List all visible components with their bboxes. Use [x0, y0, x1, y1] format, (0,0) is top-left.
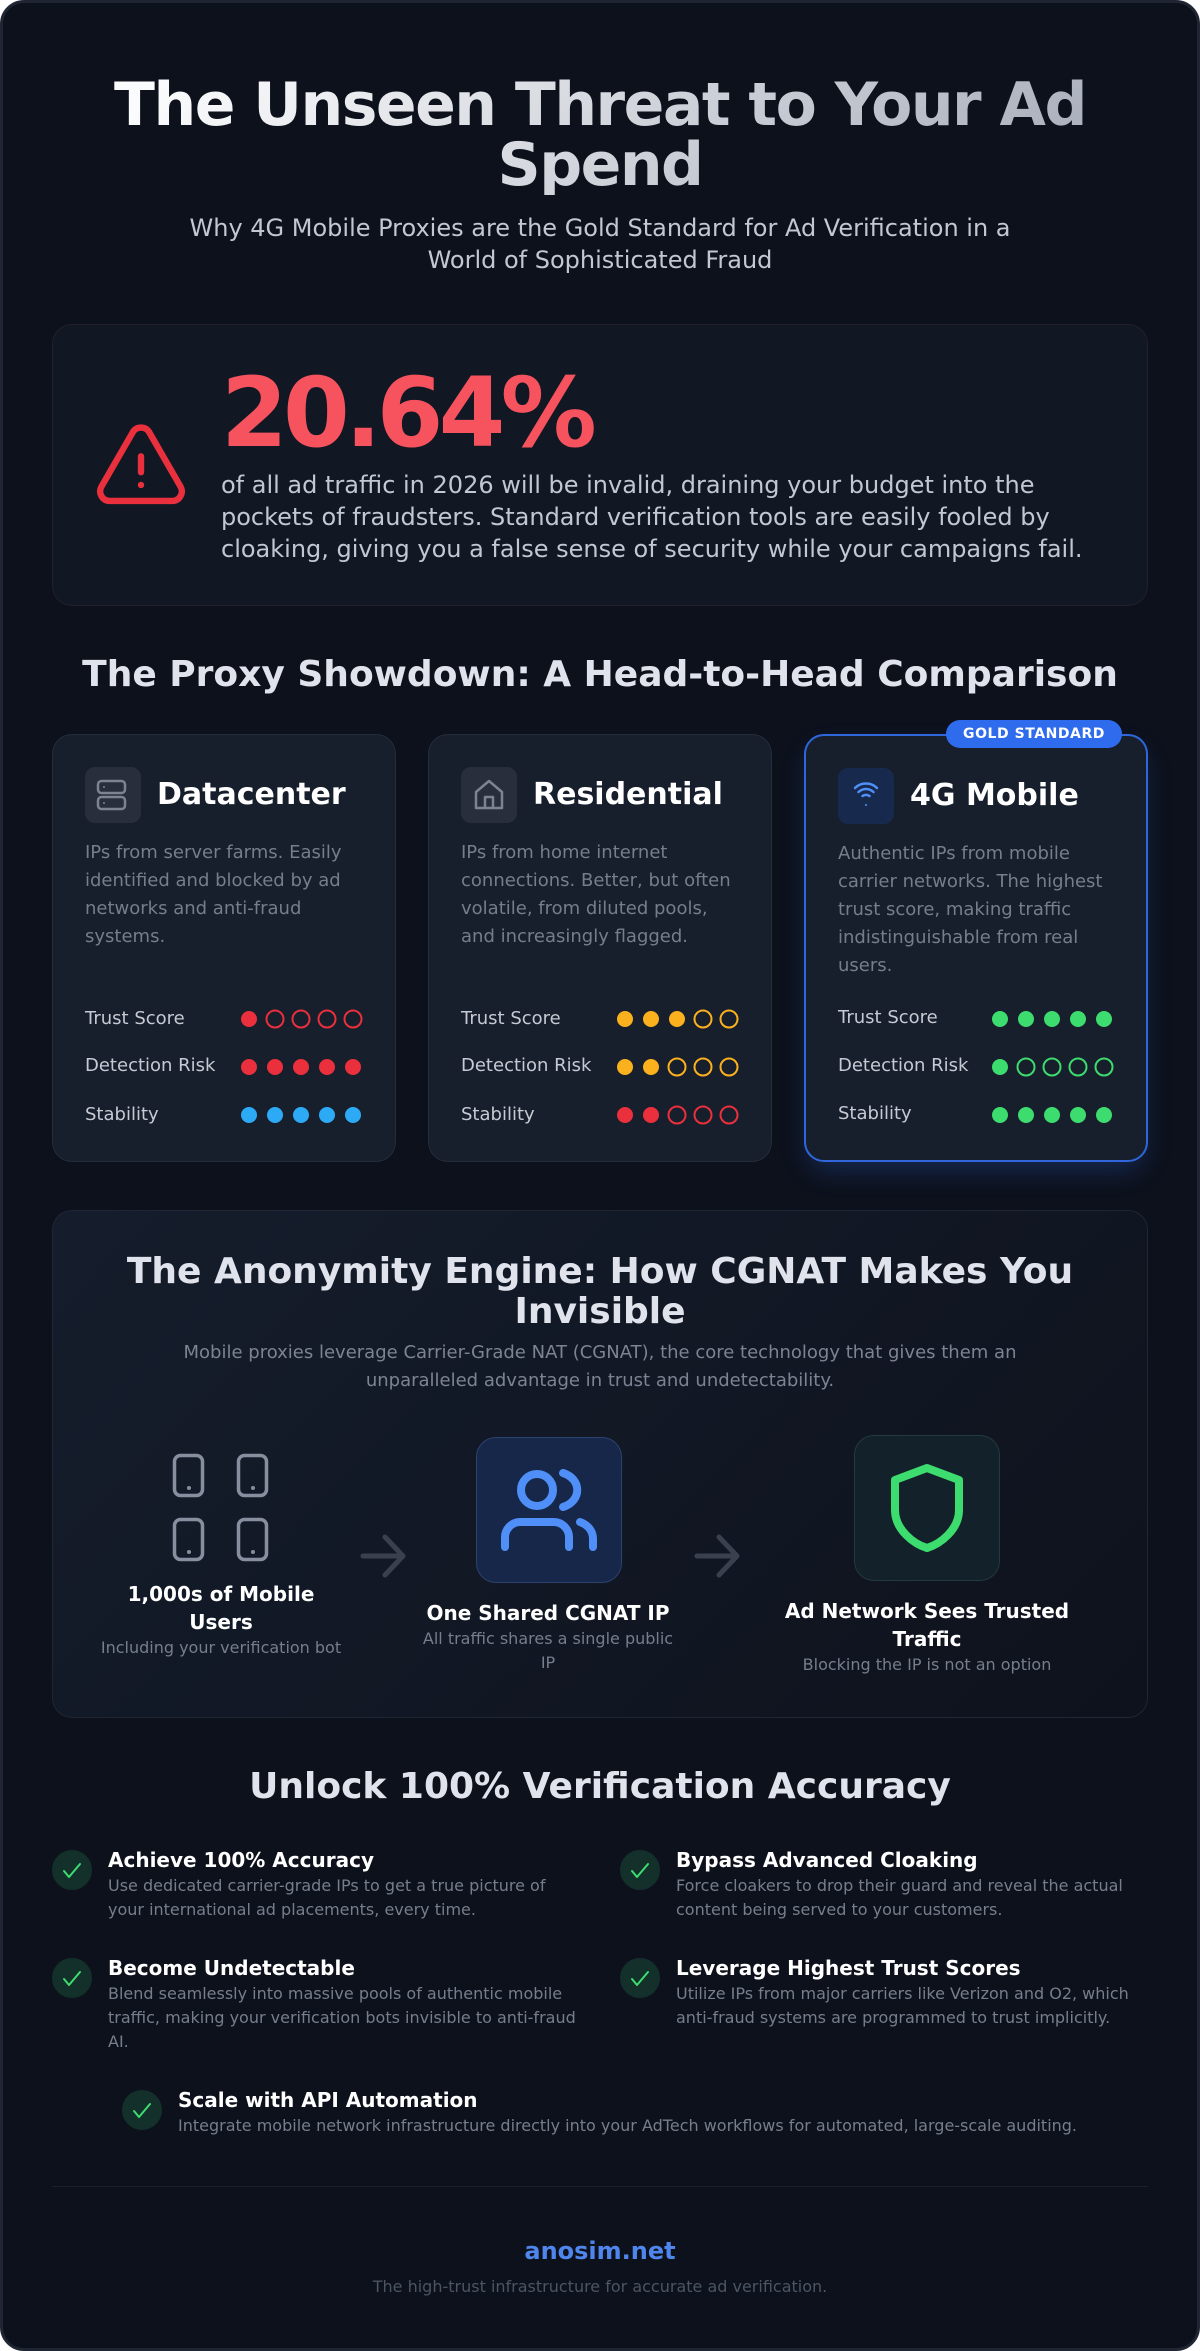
arrow	[694, 1534, 740, 1578]
card name: 4G Mobile	[910, 778, 1079, 813]
step title: Traffic	[893, 1627, 961, 1651]
step title: 1,000s of Mobile	[128, 1582, 314, 1606]
card name: Datacenter	[157, 777, 346, 812]
arrow	[360, 1534, 406, 1578]
section description: unparalleled advantage in trust and undetectability.	[366, 1370, 834, 1391]
stat description: of all ad traffic in 2026 will be invalid, draining your budget into the	[221, 471, 1034, 499]
icon: check	[122, 2090, 162, 2130]
benefit text	[108, 1876, 546, 1919]
card description	[461, 842, 731, 947]
metric: stability	[85, 1104, 361, 1125]
benefit title: Achieve 100% Accuracy	[108, 1848, 374, 1872]
step caption	[423, 1629, 673, 1672]
card description: networks and anti-fraud	[85, 898, 301, 919]
card description: and increasingly flagged.	[461, 926, 688, 947]
icon: phones	[172, 1454, 268, 1562]
icon: wifi	[838, 768, 894, 824]
card description: identified and blocked by ad	[85, 870, 341, 891]
step title: One Shared CGNAT IP	[426, 1601, 670, 1625]
metric: detection risk	[838, 1055, 1114, 1076]
benefit text: content being served to your customers.	[676, 1900, 1002, 1919]
step title: Users	[189, 1610, 253, 1634]
panel: residential card	[428, 734, 772, 1162]
subtitle: World of Sophisticated Fraud	[428, 246, 772, 274]
benefit: accuracy	[52, 1848, 546, 1919]
big number: 20.64%	[221, 357, 592, 469]
benefit text: traffic, making your verification bots invisible to anti-fraud	[108, 2008, 576, 2027]
metric: stability	[461, 1104, 738, 1125]
panel: threat statistic	[52, 324, 1148, 606]
benefit text: Blend seamlessly into massive pools of authentic mobile	[108, 1984, 562, 2003]
title: Spend	[497, 130, 703, 200]
step title	[785, 1599, 1069, 1651]
icon: check	[52, 1850, 92, 1890]
heading: CGNAT	[127, 1251, 1073, 1332]
panel: datacenter card	[52, 734, 396, 1162]
title: The Unseen Threat to Your Ad	[114, 70, 1086, 140]
step caption: IP	[541, 1653, 555, 1672]
icon: shield	[854, 1435, 1000, 1581]
flow step: trusted traffic	[785, 1435, 1069, 1674]
footer brand: anosim.net	[524, 2237, 676, 2265]
step caption: Blocking the IP is not an option	[803, 1655, 1051, 1674]
benefit text: Use dedicated carrier-grade IPs to get a true picture of	[108, 1876, 545, 1895]
panel: 4G mobile card	[804, 734, 1148, 1162]
heading: CGNAT: The Anonymity Engine: How CGNAT Makes You	[127, 1251, 1073, 1292]
icon: check	[620, 1850, 660, 1890]
icon: check	[52, 1958, 92, 1998]
card name: Residential	[533, 777, 723, 812]
benefit title: Bypass Advanced Cloaking	[676, 1848, 978, 1872]
card description	[838, 843, 1102, 976]
metric: detection risk	[85, 1055, 361, 1076]
metric: stability: Stability	[461, 1104, 535, 1125]
stat description	[221, 471, 1083, 563]
metric: detection risk	[461, 1055, 738, 1076]
benefit text: your international ad placements, every time.	[108, 1900, 476, 1919]
icon: home	[461, 767, 517, 823]
card description: connections. Better, but often	[461, 870, 731, 891]
step caption: All traffic shares a single public	[423, 1629, 673, 1648]
card description: IPs from server farms. Easily	[85, 842, 342, 863]
heading: unlock accuracy: Unlock 100% Verification Accuracy	[249, 1766, 951, 1807]
benefit: API automation	[122, 2088, 1077, 2135]
metric: trust score	[84, 1008, 362, 1029]
heading: CGNAT: Invisible	[514, 1291, 686, 1332]
benefit text: Integrate mobile network infrastructure directly into your AdTech workflows for automated, large-scale auditing.	[178, 2116, 1077, 2135]
metric: detection risk: Detection Risk	[461, 1055, 591, 1076]
subtitle	[190, 214, 1010, 274]
metric: trust score	[838, 1007, 1112, 1028]
benefit title: Scale with API Automation	[178, 2088, 478, 2112]
icon: users	[476, 1437, 622, 1583]
icon: server	[85, 767, 141, 823]
panel: anonymity engine	[52, 1210, 1148, 1718]
card description: carrier networks. The highest	[838, 871, 1102, 892]
card description: users.	[838, 955, 892, 976]
benefit: undetectable	[52, 1956, 576, 2051]
section description: Mobile proxies leverage Carrier-Grade NAT (CGNAT), the core technology that gives them an	[184, 1342, 1016, 1363]
metric: trust score: Trust Score	[461, 1008, 561, 1029]
step caption: Including your verification bot	[101, 1638, 341, 1657]
benefit text	[676, 1876, 1123, 1919]
icon: check	[620, 1958, 660, 1998]
metric: trust score: Trust Score	[838, 1007, 938, 1028]
benefit text: Force cloakers to drop their guard and reveal the actual	[676, 1876, 1123, 1895]
benefit title: Leverage Highest Trust Scores	[676, 1956, 1021, 1980]
flow step: shared IP	[423, 1437, 673, 1672]
metric: trust score: Trust Score	[85, 1008, 185, 1029]
benefit text: anti-fraud systems are programmed to trust implicitly.	[676, 2008, 1110, 2027]
card description: IPs from home internet	[461, 842, 667, 863]
benefit text: Utilize IPs from major carriers like Verizon and O2, which	[676, 1984, 1129, 2003]
title	[52, 75, 1148, 195]
card description: trust score, making traffic	[838, 899, 1071, 920]
metric: detection risk: Detection Risk	[85, 1055, 215, 1076]
stat description: cloaking, giving you a false sense of security while your campaigns fail.	[221, 535, 1083, 563]
benefit text	[676, 1984, 1129, 2027]
benefit: cloaking	[620, 1848, 1123, 1919]
card description: systems.	[85, 926, 165, 947]
benefit: trust scores	[620, 1956, 1129, 2027]
heading: proxy showdown: The Proxy Showdown: A Head-to-Head Comparison	[82, 654, 1118, 695]
stat description: pockets of fraudsters. Standard verification tools are easily fooled by	[221, 503, 1050, 531]
metric: stability	[838, 1103, 1112, 1124]
card description: Authentic IPs from mobile	[838, 843, 1070, 864]
card description	[85, 842, 342, 947]
badge: gold standard	[946, 720, 1122, 748]
metric: stability: Stability	[838, 1103, 912, 1124]
icon: warning triangle	[96, 424, 186, 504]
benefit title: Become Undetectable	[108, 1956, 355, 1980]
benefit text	[108, 1984, 576, 2051]
step title: Ad Network Sees Trusted	[785, 1599, 1069, 1623]
subtitle: Why 4G Mobile Proxies are the Gold Standard for Ad Verification in a	[190, 214, 1010, 242]
badge: gold standard: GOLD STANDARD	[963, 726, 1105, 742]
footer tagline: The high-trust infrastructure for accurate ad verification.	[373, 2277, 827, 2296]
card description: indistinguishable from real	[838, 927, 1078, 948]
metric: trust score	[460, 1008, 738, 1029]
metric: detection risk: Detection Risk	[838, 1055, 968, 1076]
step title	[128, 1582, 314, 1634]
metric: stability: Stability	[85, 1104, 159, 1125]
benefit text: AI.	[108, 2032, 129, 2051]
section description	[184, 1342, 1016, 1391]
flow step: mobile users	[101, 1454, 341, 1657]
card description: volatile, from diluted pools,	[461, 898, 708, 919]
